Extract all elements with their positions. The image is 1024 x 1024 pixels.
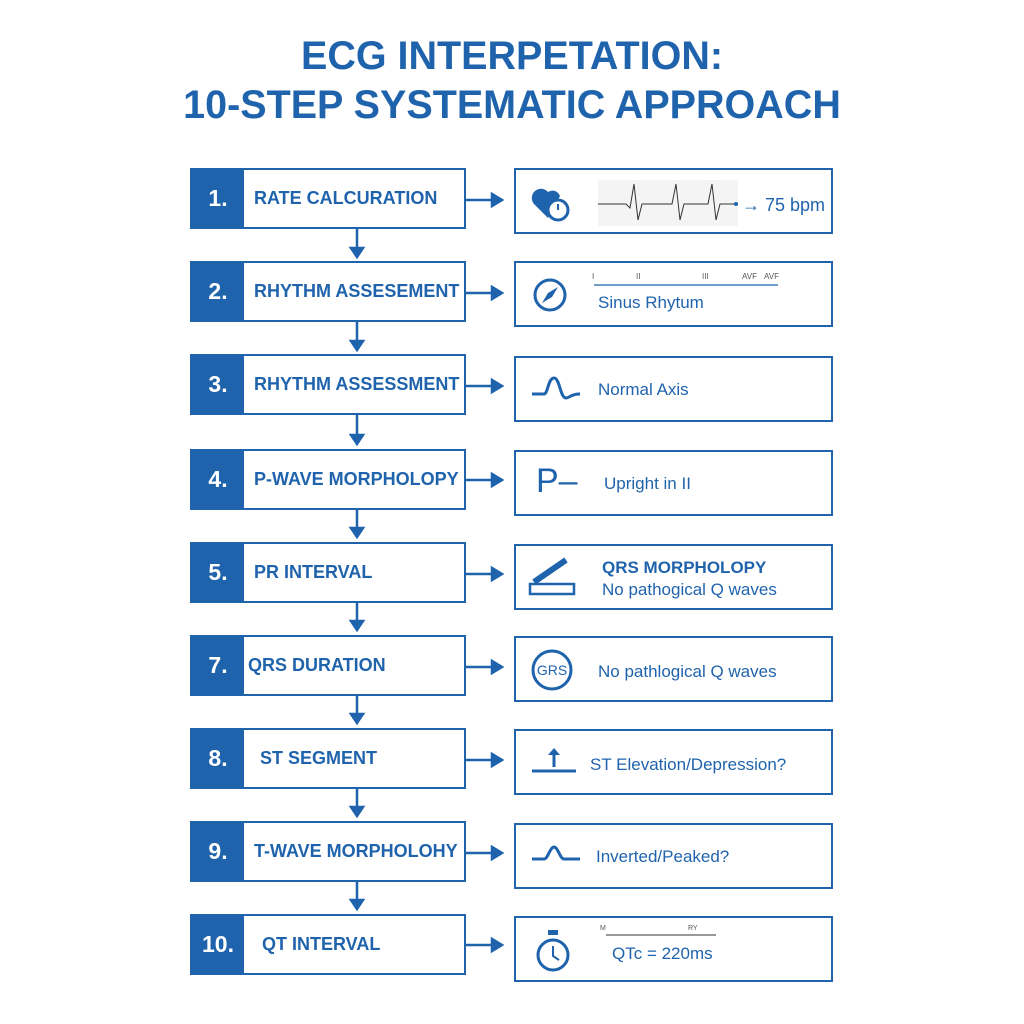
step 10: 10. xyxy=(202,931,234,957)
step 1: RATE CALCURATION xyxy=(254,188,437,208)
result 5: pr interval: QRS MORPHOLOPY xyxy=(602,558,766,577)
result 7: qrs xyxy=(514,636,833,702)
ecg strip xyxy=(598,180,738,226)
result 1: rate xyxy=(514,168,833,234)
title: ECG INTERPETATION: xyxy=(301,34,723,78)
step 9: 9. xyxy=(208,838,228,864)
step 3 xyxy=(190,354,466,415)
axis line: II xyxy=(636,272,640,281)
result 5: pr interval xyxy=(514,544,833,610)
result 2: rhythm xyxy=(514,261,833,327)
interval marker: M xyxy=(600,925,606,932)
axis line: I xyxy=(592,272,594,281)
step 2: 2. xyxy=(208,278,228,304)
step 9: T-WAVE MORPHOLOHY xyxy=(254,841,458,861)
icon: wave xyxy=(532,376,580,400)
result 8: st xyxy=(514,729,833,795)
axis line: AVF xyxy=(742,272,757,281)
step 3: RHYTHM ASSESSMENT xyxy=(254,374,459,394)
result 10: qt: QTc = 220ms xyxy=(612,944,713,963)
result 4: p-wave xyxy=(514,450,833,516)
axis line: AVF xyxy=(764,272,779,281)
step 4 xyxy=(190,449,466,510)
axis line xyxy=(592,272,779,286)
step 10: QT INTERVAL xyxy=(262,934,380,954)
result 4: p-wave: Upright in II xyxy=(604,474,691,493)
step 8 xyxy=(190,728,466,789)
result 9: t-wave: Inverted/Peaked? xyxy=(596,847,729,866)
step 1: 1. xyxy=(208,185,228,211)
icon: GRS circle xyxy=(532,650,572,690)
step 8: 8. xyxy=(208,745,228,771)
result 7: qrs: No pathlogical Q waves xyxy=(598,662,777,681)
result 10: qt xyxy=(514,916,833,982)
result 1: rate: → 75 bpm xyxy=(742,195,825,215)
result 9: t-wave xyxy=(514,823,833,889)
step 8: ST SEGMENT xyxy=(260,748,377,768)
interval marker xyxy=(600,925,716,936)
step 7: QRS DURATION xyxy=(248,655,386,675)
step 5: 5. xyxy=(208,559,228,585)
step 5: PR INTERVAL xyxy=(254,562,372,582)
step 4: 4. xyxy=(208,466,228,492)
result 8: st: ST Elevation/Depression? xyxy=(590,755,786,774)
icon: t wave xyxy=(532,846,580,860)
icon: GRS circle: GRS xyxy=(537,662,567,678)
axis line: III xyxy=(702,272,709,281)
icon: stopwatch xyxy=(536,930,570,972)
title: 10-STEP SYSTEMATIC APPROACH xyxy=(183,83,841,127)
step 2: RHYTHM ASSESEMENT xyxy=(254,281,459,301)
title xyxy=(183,34,841,127)
icon: heart stopwatch xyxy=(532,188,570,222)
icon: ruler xyxy=(528,558,576,596)
result 3: axis: Normal Axis xyxy=(598,380,689,399)
step 9 xyxy=(190,821,466,882)
step 7: 7. xyxy=(208,652,228,678)
icon: compass xyxy=(534,278,566,312)
icon: P: P– xyxy=(536,462,578,500)
step 10 xyxy=(190,914,466,975)
step 4: P-WAVE MORPHOLOPY xyxy=(254,469,459,489)
step 2 xyxy=(190,261,466,322)
step 3: 3. xyxy=(208,371,228,397)
step 7 xyxy=(190,635,466,696)
icon: up arrow xyxy=(532,748,576,772)
interval marker: RY xyxy=(688,925,698,932)
step 1 xyxy=(190,168,466,229)
result 5: pr interval: No pathogical Q waves xyxy=(602,580,777,599)
result 2: rhythm: Sinus Rhytum xyxy=(598,293,704,312)
result 3: axis xyxy=(514,356,833,422)
step 5 xyxy=(190,542,466,603)
